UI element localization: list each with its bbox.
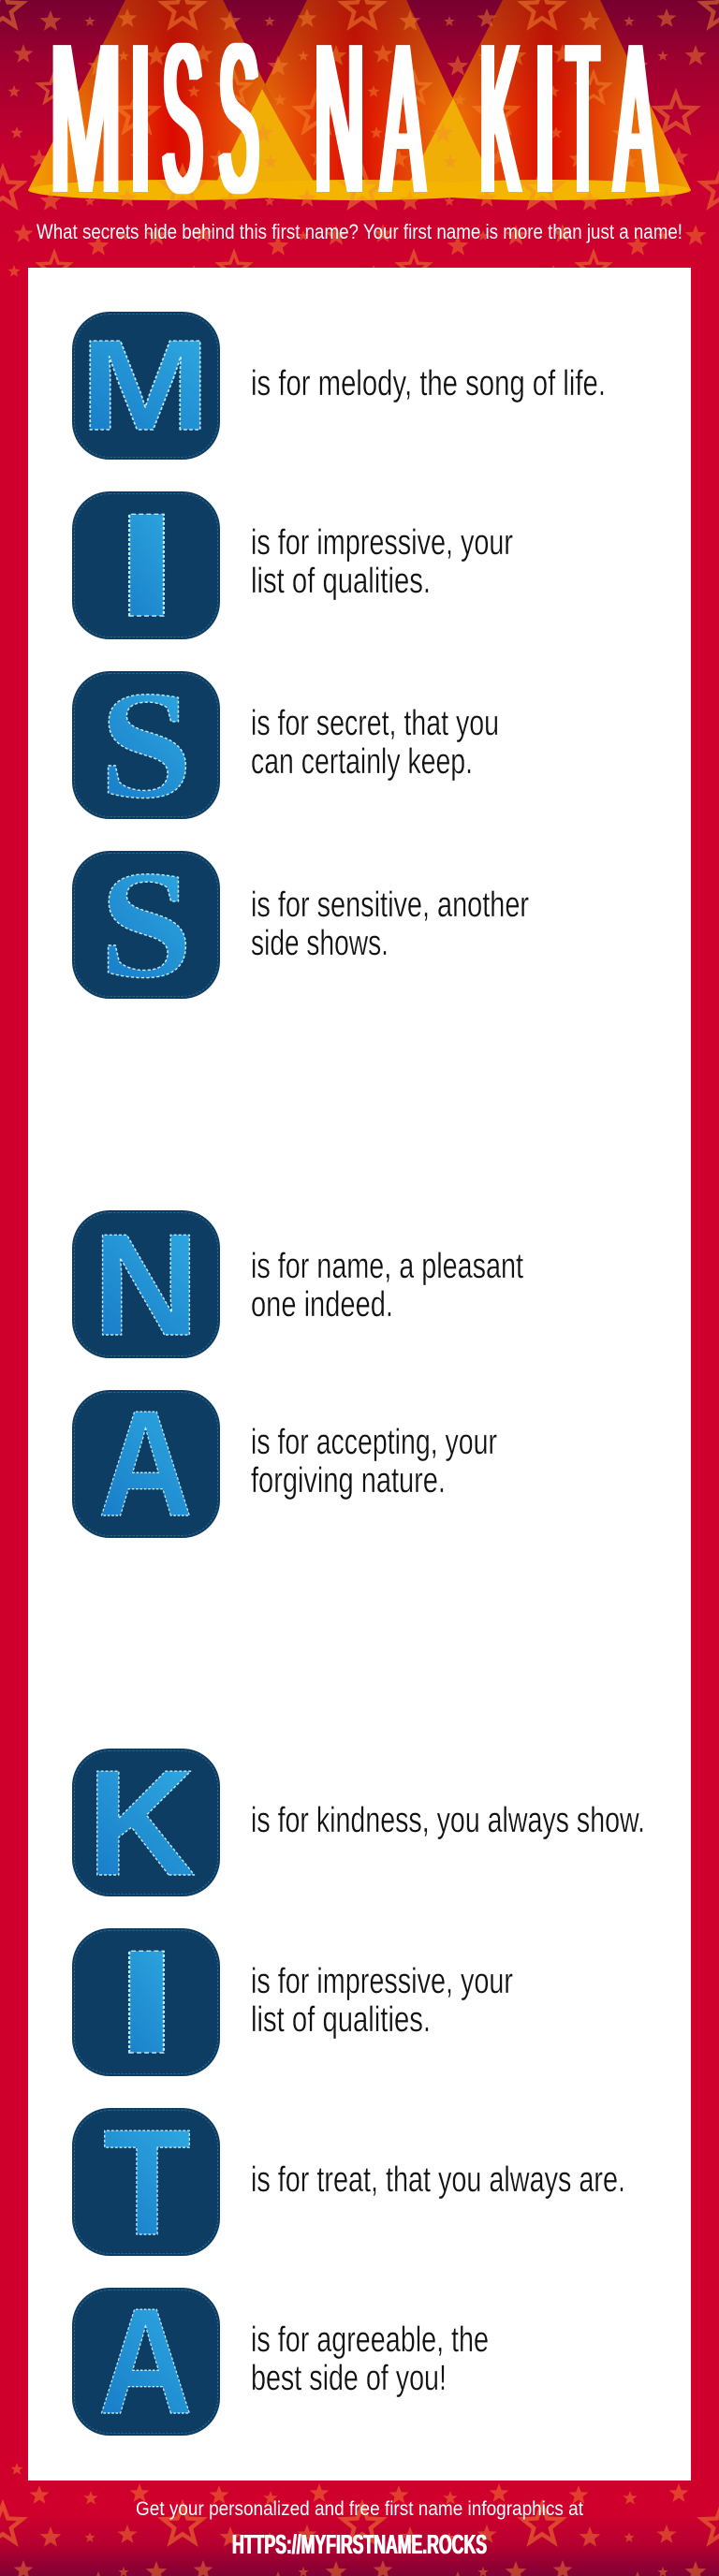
tile: T — [72, 2099, 220, 2267]
title: M — [50, 0, 122, 238]
text: S: side shows. — [251, 924, 389, 963]
title: K — [480, 0, 520, 238]
tile: A: A — [98, 2277, 193, 2446]
title: A — [382, 0, 424, 238]
text: S — [251, 704, 499, 782]
title — [50, 0, 656, 238]
text: I: list of qualities. — [251, 2000, 431, 2040]
text: I: is for impressive, your — [251, 523, 513, 563]
text: N: is for name, a pleasant — [251, 1247, 523, 1286]
tile: I — [72, 1920, 220, 2085]
text: I — [251, 523, 513, 601]
text: M: is for melody, the song of life. — [251, 364, 606, 403]
panel: white content area — [28, 268, 691, 2481]
title: S — [219, 0, 258, 238]
text: I: is for impressive, your — [251, 1962, 513, 2001]
spotlights — [28, 0, 691, 200]
tile: A: A — [98, 1380, 193, 1548]
tile: N: N — [93, 1204, 199, 1366]
title: T — [567, 0, 598, 238]
tile: S — [72, 839, 220, 1010]
tile: S: S — [99, 659, 193, 830]
tile: I: I — [113, 1920, 180, 2085]
tile: M: M — [80, 314, 211, 458]
tile: I: I — [113, 483, 180, 648]
text: I — [251, 1962, 513, 2040]
title: I — [534, 0, 556, 238]
text: A: forgiving nature. — [251, 1461, 446, 1500]
text: A: is for accepting, your — [251, 1423, 497, 1462]
tile: I — [72, 483, 220, 648]
text: S — [251, 886, 529, 963]
title: I — [129, 0, 152, 238]
text: A — [251, 2320, 489, 2398]
text: I: list of qualities. — [251, 562, 431, 601]
footer text: Get your personalized and free first name infographics at — [136, 2498, 583, 2520]
text: S: is for secret, that you — [251, 704, 499, 743]
title: S — [163, 0, 202, 238]
star pattern top — [0, 0, 719, 281]
tile: S — [72, 659, 220, 830]
text: A — [251, 1423, 497, 1500]
text: N — [251, 1247, 523, 1325]
tile: S: S — [99, 839, 193, 1010]
text: S: is for sensitive, another — [251, 886, 529, 925]
tile: K: K — [87, 1739, 196, 1908]
tile: T: T — [103, 2099, 191, 2267]
star pattern bottom — [0, 2458, 719, 2576]
text: S: can certainly keep. — [251, 742, 473, 782]
text: N: one indeed. — [251, 1285, 393, 1325]
title: N — [315, 0, 364, 238]
text: A: is for agreeable, the — [251, 2320, 489, 2360]
text: A: best side of you! — [251, 2359, 447, 2398]
footer url: HTTPS://MYFIRSTNAME.ROCKS — [232, 2530, 487, 2560]
